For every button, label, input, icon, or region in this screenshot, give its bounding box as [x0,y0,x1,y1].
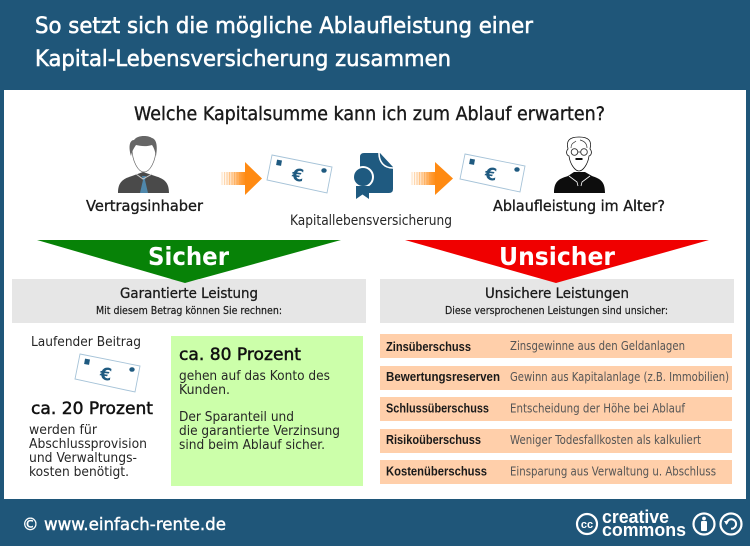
text block: 20 percent: ca. 20 Prozent [31,399,153,419]
text block: 20 percent: Abschlussprovision [29,437,147,452]
row: Zinsüberschuss [380,334,732,358]
panel: 80 percent: die garantierte Verzinsung [179,424,340,439]
row: Schlussüberschuss [380,397,732,421]
panel: 80 percent: ca. 80 Prozent [179,345,301,365]
icon: contract holder [118,136,169,193]
icon: banknote 2 [460,154,525,192]
row: Risikoüberschuss: Risikoüberschuss [386,433,481,447]
footer URL: © www.einfach-rente.de [22,515,226,535]
panel: 80 percent [171,336,363,486]
grey band: uncertain [380,279,734,323]
row: Bewertungsreserven [380,366,732,390]
panel: unsafe header [405,240,709,283]
panel: 80 percent: gehen auf das Konto des [179,369,330,384]
text block: 20 percent: und Verwaltungs- [29,451,137,466]
grey band: guaranteed: Mit diesem Betrag können Sie rechnen: [96,305,282,317]
panel: 80 percent: Kunden. [179,383,230,398]
label: Ablaufleistung im Alter: Ablaufleistung im Alter? [493,197,665,215]
panel: 80 percent: sind beim Ablauf sicher. [179,438,325,453]
icon: creative commons logo: cc [581,519,593,531]
title: Kapital-Lebensversicherung zusammen [35,47,451,72]
text: running contribution: Laufender Beitrag [31,335,141,350]
heading: Sicher: Sicher [148,242,230,271]
red triangle [405,240,709,283]
label: Vertragsinhaber: Vertragsinhaber [86,197,204,215]
icon: creative commons logo [577,507,742,540]
text block: 20 percent [29,399,153,480]
row: Kostenüberschuss: Einsparung aus Verwaltung u. Abschluss [510,464,716,478]
row: Zinsüberschuss: Zinsüberschuss [386,340,471,354]
title [35,14,534,72]
row: Schlussüberschuss: Schlussüberschuss [386,402,489,416]
icon: banknote 3 [75,354,140,392]
row: Risikoüberschuss: Weniger Todesfallkosten als kalkuliert [510,433,701,447]
arrow 2 [410,162,453,195]
icon: creative commons logo: commons [602,520,686,540]
grey band: uncertain: Diese versprochenen Leistungen sind unsicher: [445,305,668,317]
label: Kapitallebensversicherung: Kapitallebensversicherung [290,213,452,229]
grey band: guaranteed: Garantierte Leistung [120,286,258,302]
title: So setzt sich die mögliche Ablaufleistung einer [35,14,534,39]
row: Kostenüberschuss: Kostenüberschuss [386,464,487,478]
arrow 1 [220,162,262,195]
icon: retiree [554,137,605,193]
panel: safe header [37,240,341,283]
green triangle [37,240,341,283]
icon: creative commons logo: creative [602,507,669,527]
row: Risikoüberschuss [380,429,732,453]
row: Schlussüberschuss: Entscheidung der Höhe bei Ablauf [510,402,686,416]
main white panel [4,90,746,499]
grey band: uncertain: Unsichere Leistungen [485,286,629,302]
text block: 20 percent: kosten benötigt. [29,465,129,480]
text block: 20 percent: werden für [29,423,98,438]
question heading: Welche Kapitalsumme kann ich zum Ablauf erwarten? [134,103,605,125]
grey band: guaranteed [12,279,366,323]
icon: banknote 1 [267,155,332,193]
row: Kostenüberschuss [380,460,732,484]
icon: policy document [352,153,393,199]
row: Bewertungsreserven: Bewertungsreserven [386,370,500,384]
row: Zinsüberschuss: Zinsgewinne aus den Geldanlagen [510,339,685,353]
panel: 80 percent: Der Sparanteil und [179,410,294,425]
heading: Unsicher: Unsicher [499,242,616,271]
